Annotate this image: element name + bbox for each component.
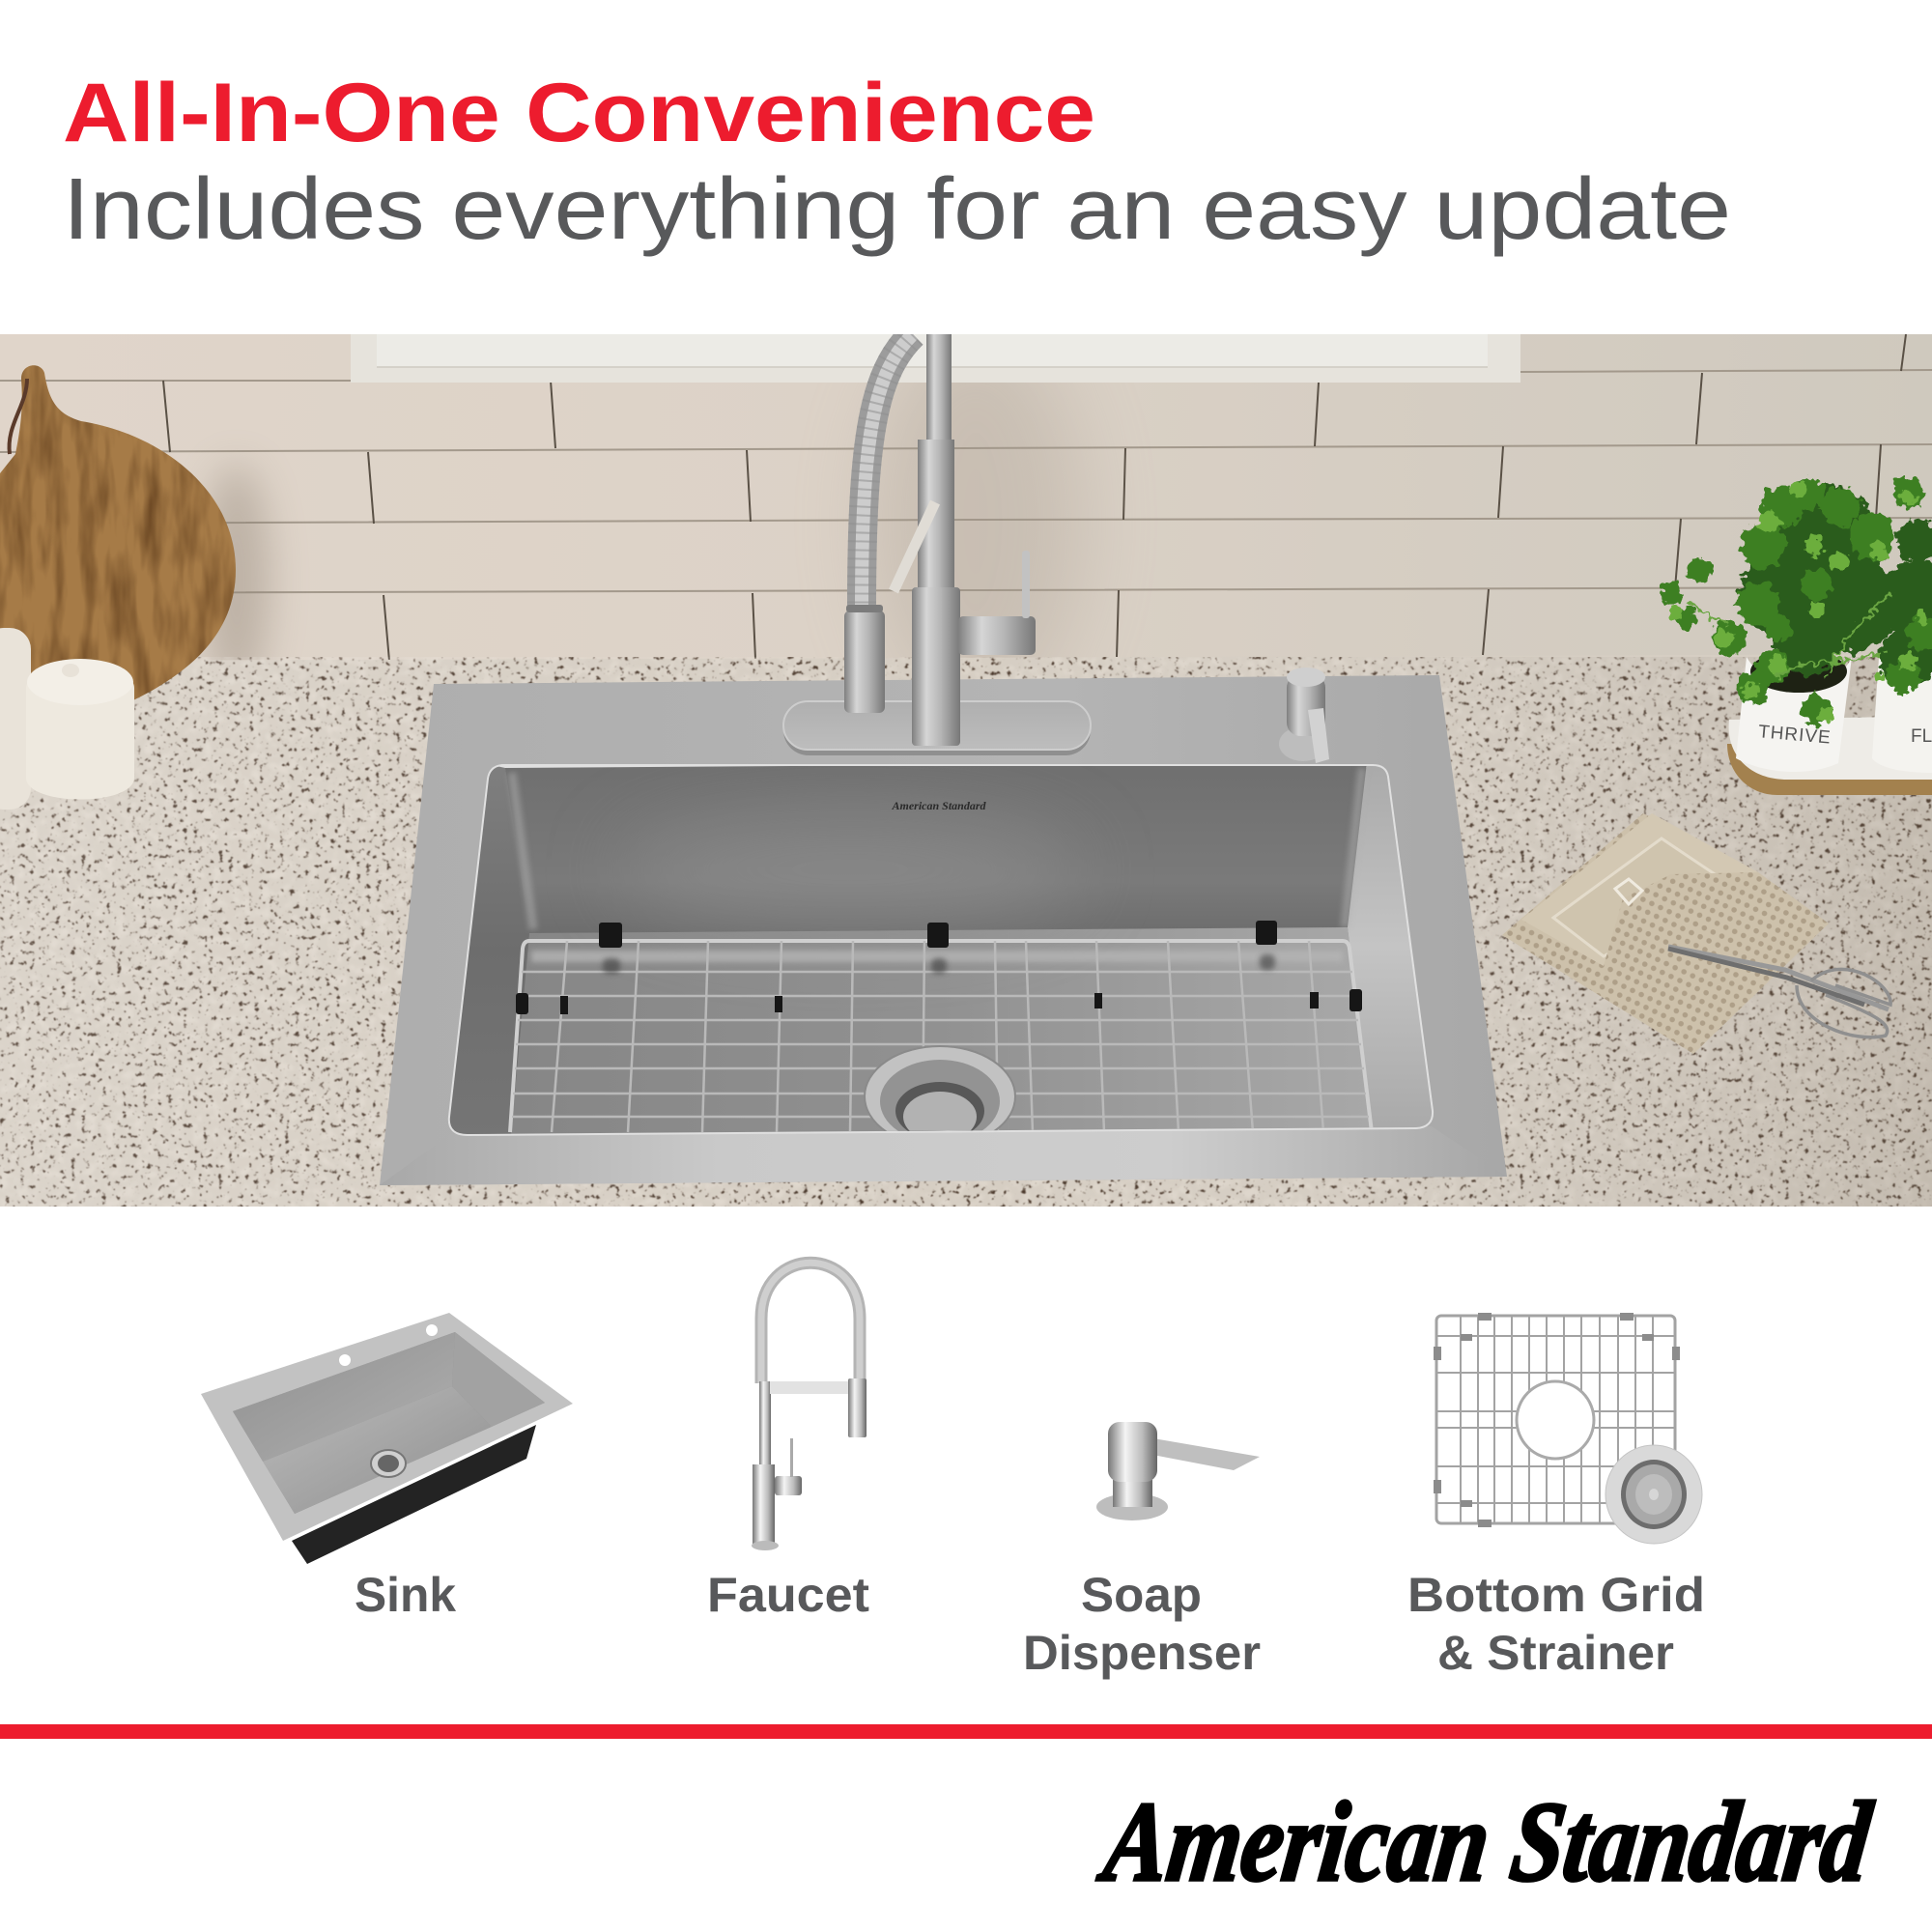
engraved brand mark: American Standard [891,799,987,812]
bottom grid [510,941,1372,1132]
base [912,587,960,746]
wooden cutting board [0,365,236,715]
backsplash tiles [0,328,1932,715]
grid clips [1434,1313,1680,1527]
soap dispenser [1279,668,1329,763]
product: faucet [752,1263,867,1550]
back wall glow [618,811,1082,927]
thin tube [759,1381,771,1466]
towel [1502,813,1829,1054]
label: FL: FL [1911,726,1932,747]
light corner streaks [512,768,1362,929]
product: bottom grid and strainer [1434,1313,1702,1544]
base [1096,1493,1168,1520]
label: THRIVE: THRIVE [1757,722,1832,749]
label: Soap Dispenser: Dispenser [1023,1626,1261,1680]
label: Bottom Grid & Strainer [1407,1568,1705,1680]
product: soap dispenser [1096,1422,1260,1520]
faucet riser [926,334,952,445]
back wall [505,762,1367,933]
tap holes [339,1354,351,1366]
black underside [292,1425,536,1564]
scissors [1668,947,1890,1037]
product basin [233,1332,545,1514]
label: Soap Dispenser: Soap [1081,1568,1202,1622]
heading [63,67,1731,258]
head [848,1378,867,1437]
herb pots on tray [1727,650,1932,795]
sink basin [444,760,1439,1136]
grid hole [1517,1381,1594,1459]
clip reflections [603,954,1275,974]
strainer [865,1046,1015,1147]
product: sink [201,1313,573,1564]
drain [371,1450,406,1477]
label: Bottom Grid & Strainer: Bottom Grid [1407,1568,1705,1622]
spring tube [862,334,913,609]
deck plate [783,701,1091,755]
floor highlight bar [531,951,1343,962]
crossbar [894,502,935,591]
granite countertop [0,654,1932,1208]
pull-down head [844,611,885,713]
floor [511,927,1372,1134]
faucet shadow on wall [876,383,1087,658]
front rim highlight [380,1126,1507,1185]
label: Faucet: Faucet [707,1568,869,1622]
label: Soap Dispenser [1023,1568,1261,1680]
sink top plate [380,675,1507,1185]
flange [201,1313,573,1541]
body [1108,1422,1157,1482]
black grid clips [516,921,1362,1014]
spout [1148,1437,1260,1470]
handle [775,1476,802,1495]
title line: All-In-One Convenience [63,67,1095,159]
window sill panel [351,334,1520,383]
right wall [1348,766,1432,1128]
panel: kitchen sink photo [0,328,1932,1208]
label: Sink: Sink [355,1568,456,1622]
crossbar [770,1381,849,1394]
subtitle line: Includes everything for an easy update [63,161,1731,258]
left wall [444,763,529,1136]
stem [753,1464,775,1544]
white canisters [0,628,134,810]
label: Bottom Grid & Strainer: & Strainer [1437,1626,1674,1680]
red divider bar [0,1724,1932,1739]
kitchen faucet [844,334,1036,746]
strainer [1605,1445,1702,1544]
handle [958,616,1036,655]
neck [1113,1480,1152,1507]
board shadow on wall [204,464,270,696]
stainless sink [380,675,1507,1185]
wire grid [1436,1316,1675,1523]
parsley plant [1660,477,1932,725]
spring arc [761,1263,860,1383]
